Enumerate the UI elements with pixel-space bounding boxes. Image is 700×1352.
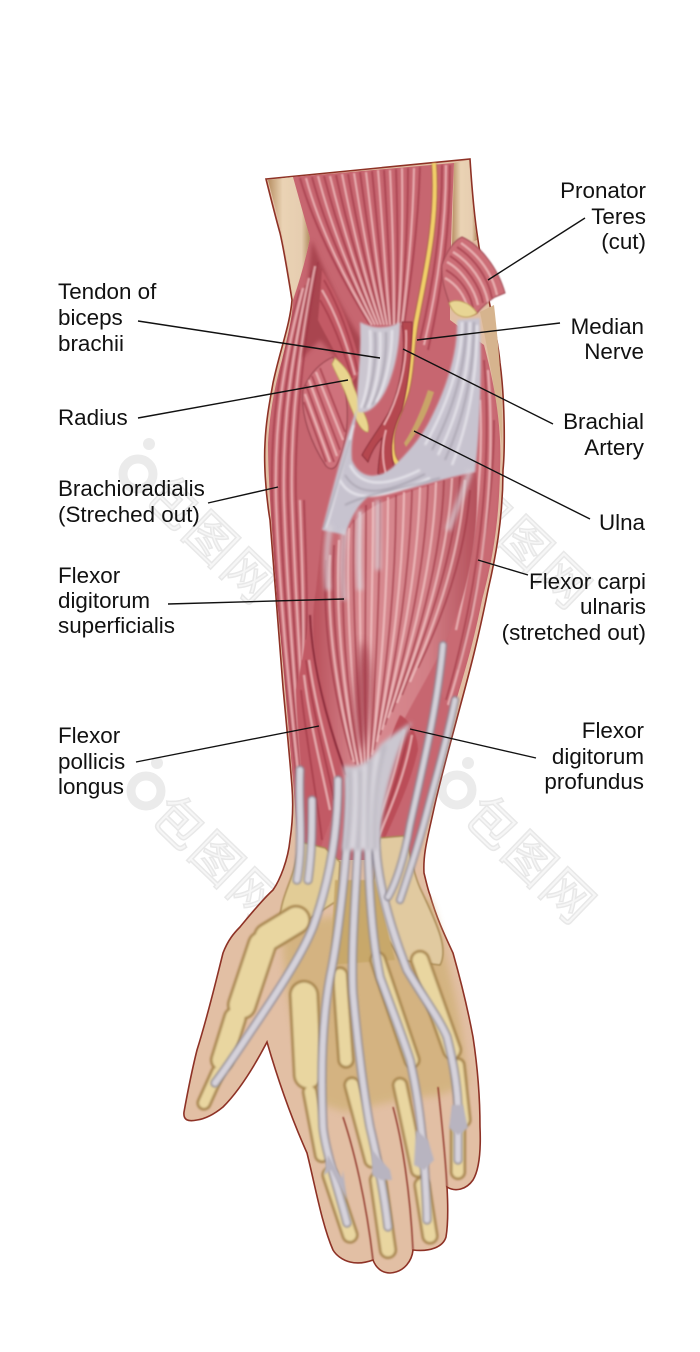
skin strip: right of ulna [480,305,502,445]
muscle: deep band below fan [318,270,362,385]
label: tendon of biceps brachii: biceps [58,305,123,330]
label: brachioradialis: Brachioradialis [58,476,205,501]
muscle: left side dark shadow under fan [300,240,362,400]
label: median nerve: Median [571,314,644,339]
muscle: brachioradialis [272,262,318,790]
watermark: lower left: 包图网 [141,785,294,936]
illustration: forearm and hand [184,150,510,1273]
label: pronator teres: (cut) [601,229,646,254]
label: brachial artery: Brachial [563,409,644,434]
watermark: lower right: 包图网 [454,785,607,936]
metacarpal and phalanx bones [204,920,464,1250]
tendon junction above wrist [342,722,412,850]
label: flexor digitorum superficialis: superficialis [58,613,175,638]
bone: ulna head [449,301,477,317]
artery: brachial artery [362,322,412,476]
watermark: upper left: 包图网 [135,465,288,616]
label: radius: Radius [58,405,128,430]
label: ulna: Ulna [599,510,646,535]
label: pronator teres: Teres [591,204,646,229]
label: flexor digitorum profundus: Flexor [582,718,645,743]
finger separations [343,1087,447,1260]
label: tendon of biceps brachii: brachii [58,331,124,356]
tendon of biceps brachii [357,322,400,413]
label: median nerve: Nerve [584,339,644,364]
label: flexor digitorum superficialis: Flexor [58,563,121,588]
label: flexor digitorum profundus: digitorum [552,744,644,769]
muscle: flexor pollicis longus [296,615,346,850]
label: flexor digitorum profundus: profundus [544,769,644,794]
muscle: pronator teres (cut) [442,237,505,315]
bone: radius [332,358,368,432]
label: flexor pollicis longus: Flexor [58,723,121,748]
label: tendon of biceps brachii: Tendon of [58,279,157,304]
muscle: flexor digitorum profundus [380,714,418,838]
skin strip: upper right [452,160,477,250]
muscle: dark centre of superficialis [354,640,371,752]
label: flexor carpi ulnaris: (stretched out) [502,620,646,645]
nerve: median nerve [392,163,435,464]
muscle: upper flexor fan [300,165,450,350]
watermark: upper right: 包图网 [450,470,603,621]
bone: ulna shaft [404,390,434,447]
muscle: flexor carpi ulnaris [445,360,495,706]
watermark [123,438,607,936]
carpal bones of the wrist [280,836,443,965]
muscle: supinator oval [303,357,347,469]
tendon streaks fading into superficialis [327,470,470,600]
label: flexor pollicis longus: longus [58,774,124,799]
tendon forks at the digits [324,1105,468,1200]
flexor tendons [215,760,458,1227]
label: flexor carpi ulnaris: Flexor carpi [529,569,646,594]
palm shading behind the bones [282,900,468,1112]
label: brachial artery: Artery [584,435,645,460]
label: pronator teres: Pronator [560,178,647,203]
leader lines [136,218,590,762]
flexor digitorum profundus tendon bundle [388,645,455,900]
label: flexor digitorum superficialis: digitorum [58,588,150,613]
label: flexor pollicis longus: pollicis [58,749,125,774]
skin wedge: upper left [268,177,310,298]
label: flexor carpi ulnaris: ulnaris [580,594,646,619]
muscle: flexor digitorum superficialis [313,472,477,770]
label: brachioradialis: (Streched out) [58,502,200,527]
bicipital aponeurosis and common flexor tendon fan [322,318,481,535]
skin silhouette [184,159,504,1273]
forearm muscle mass [260,150,510,870]
